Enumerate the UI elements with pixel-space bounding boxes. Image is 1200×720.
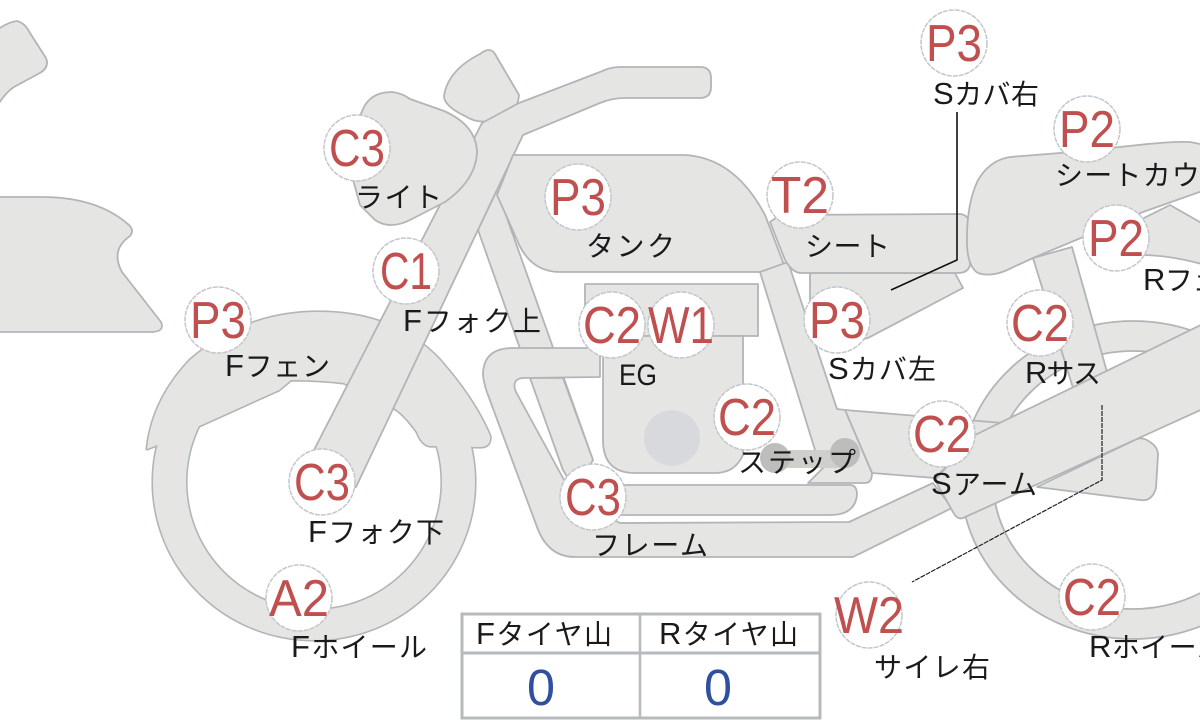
leader line: right side cover [891, 112, 957, 290]
seat [770, 214, 970, 273]
exhaust pipe [590, 485, 857, 515]
label: lower fork: Fフォク下 [308, 514, 444, 549]
badge: P3 tank: P3 [550, 169, 606, 227]
badge: W2 right muffler: W2 [834, 587, 904, 645]
badge: C3 lower fork: C3 [294, 454, 350, 512]
meter [444, 50, 519, 122]
badge: P2 seat cowl: P2 [1059, 101, 1115, 159]
badge: C2 step: C2 [718, 389, 776, 447]
frame down tube [478, 190, 593, 470]
seat tube and step plate [760, 262, 872, 483]
engine [603, 336, 743, 473]
table value: front tire: 0 [527, 659, 555, 716]
step markers [760, 438, 860, 473]
badge: C2 swing arm: C2 [913, 406, 971, 464]
badge: P3 left side cover: P3 [809, 292, 865, 350]
badge: C2 rear wheel: C2 [1063, 569, 1121, 627]
badge: C2 engine: C2 [583, 297, 641, 355]
fuel tank [497, 155, 784, 272]
badge: C3 frame: C3 [565, 469, 621, 527]
swing arm base [845, 410, 1003, 478]
headlight [345, 92, 477, 225]
rear wheel [961, 321, 1200, 639]
label: rear suspension: Rサス [1025, 355, 1101, 390]
badge: P3 right side cover: P3 [926, 15, 982, 73]
left body fragment [0, 197, 162, 332]
label: right side cover: Sカバ右 [933, 76, 1039, 111]
label: step: ステップ [738, 447, 856, 478]
rear fender [1087, 205, 1200, 265]
tire tread table [462, 614, 820, 718]
badge: A2 front wheel: A2 [269, 570, 329, 628]
frame inner tube [530, 378, 593, 490]
badge: P3 front fender: P3 [190, 292, 246, 350]
label: right muffler: サイレ右 [874, 652, 990, 683]
label: tank: タンク [586, 231, 675, 262]
label: swing arm: Sアーム [931, 466, 1037, 501]
label: engine: EG [619, 359, 657, 392]
badge: C1 upper fork: C1 [380, 243, 432, 301]
frame loop [483, 348, 952, 557]
label: left side cover: Sカバ左 [828, 351, 936, 386]
leader line: right muffler [912, 405, 1102, 582]
badge: C2 rear suspension: C2 [1011, 295, 1069, 353]
muffler [1037, 438, 1158, 500]
table header: front tire: Fタイヤ山 [476, 616, 612, 651]
badge: C3 light: C3 [329, 120, 385, 178]
front fork and handlebar [314, 67, 711, 495]
seat cowl [967, 142, 1200, 275]
table value: rear tire: 0 [704, 659, 732, 716]
label: front wheel: Fホイール [291, 629, 427, 664]
table header: rear tire: Rタイヤ山 [659, 616, 798, 651]
side cover [810, 273, 963, 345]
label: frame: フレーム [592, 530, 708, 561]
label: light: ライト [355, 182, 442, 213]
badge: P2 rear fender: P2 [1088, 210, 1144, 268]
rear suspension [1033, 247, 1107, 388]
front wheel and fender [147, 312, 490, 640]
label: upper fork: Fフォク上 [403, 303, 541, 338]
label: seat: シート [805, 231, 890, 262]
label: front fender: Fフェン [225, 348, 330, 383]
badge: W1 engine: W1 [648, 297, 714, 355]
swing arm [935, 323, 1200, 518]
engine top [585, 284, 758, 336]
engine crank cover [644, 410, 700, 466]
badge: T2 seat: T2 [771, 167, 829, 225]
left mirror [0, 21, 47, 106]
